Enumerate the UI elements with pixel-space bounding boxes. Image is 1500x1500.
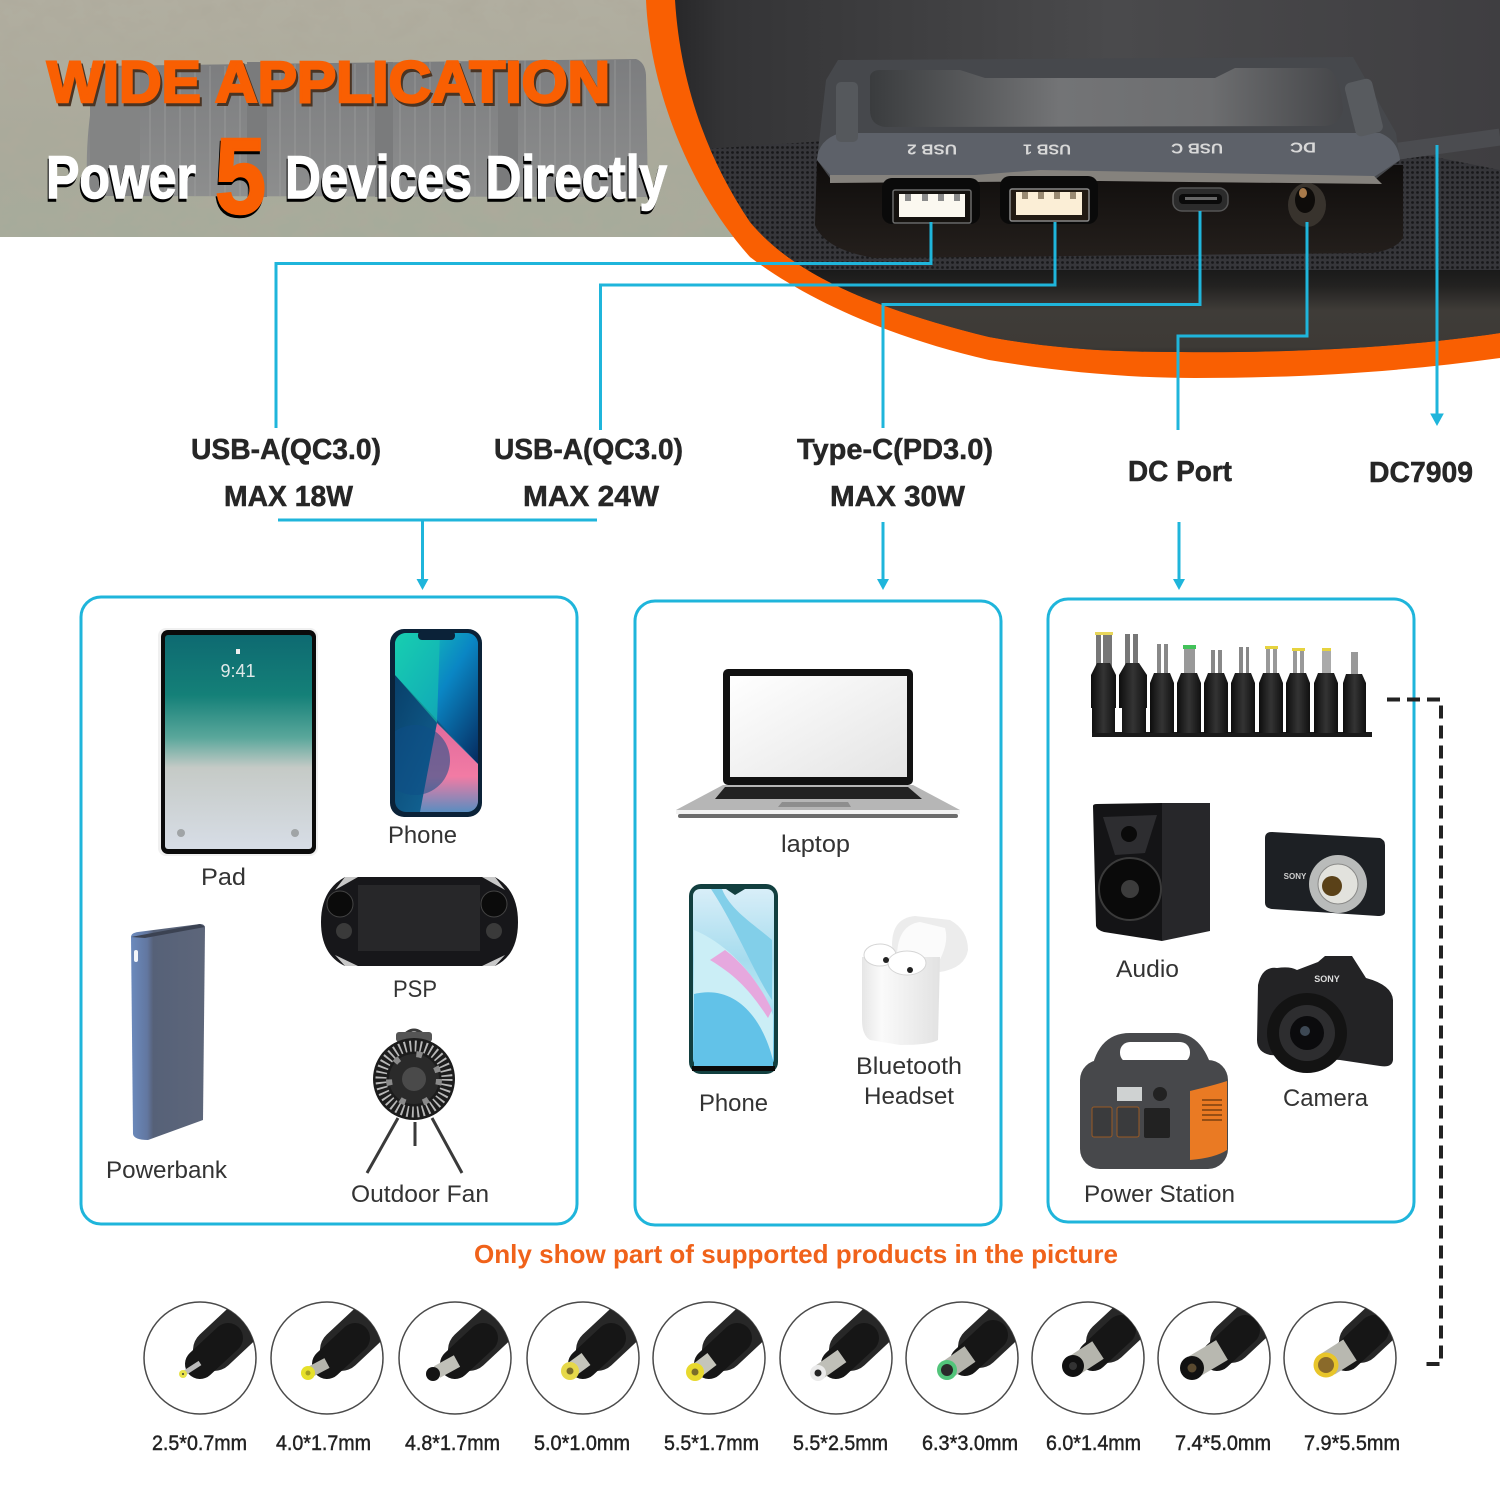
adapter size labels: 4.8*1.7mm [405, 1432, 500, 1455]
adapter tip: 6.3*3.0mm [905, 1301, 1019, 1415]
label: Type-C 30W: Type-C(PD3.0) [797, 434, 993, 466]
icon: pad: 9:41 [220, 661, 256, 681]
label: Type-C 30W: MAX 30W [830, 481, 966, 513]
text: device labels: Audio [1116, 956, 1179, 983]
label: USB-A 18W: MAX 18W [224, 481, 354, 513]
orange arc band [646, 0, 1500, 378]
port: DC jack [1288, 183, 1326, 227]
adapter size labels: 7.9*5.5mm [1304, 1432, 1400, 1455]
adapter tip: 7.9*5.5mm [1283, 1301, 1397, 1415]
adapter size labels: 2.5*0.7mm [152, 1432, 247, 1455]
note: supported products: Only show part of supported products in the picture [474, 1239, 1118, 1269]
icon: phone [380, 629, 482, 817]
icon: speaker [1093, 803, 1210, 941]
header photo: solar panel on grass [0, 0, 760, 237]
label: USB-A 24W: MAX 24W [523, 481, 660, 513]
port box body [815, 160, 1403, 258]
icon: compact camera [1265, 832, 1385, 916]
subtitle: Power 5 Devices Directly: Devices Directly [285, 144, 668, 211]
text: device labels: Power Station [1084, 1181, 1235, 1208]
label: DC7909: DC7909 [1369, 457, 1473, 489]
adapter tip: 5.5*2.5mm [779, 1301, 893, 1415]
adapter tip: 4.0*1.7mm [270, 1301, 384, 1415]
icon: laptop [676, 669, 960, 818]
adapter size labels: 6.0*1.4mm [1046, 1432, 1141, 1455]
icon: outdoor fan [367, 1030, 462, 1173]
adapter tip: 6.0*1.4mm [1031, 1301, 1145, 1415]
adapter size labels: 6.3*3.0mm [922, 1432, 1018, 1455]
product photo: output port box [675, 0, 1500, 352]
text: device labels: Phone [699, 1090, 768, 1117]
adapter tip: 4.8*1.7mm [398, 1301, 512, 1415]
product photo: output port box: DC [1290, 138, 1316, 156]
label: Type-C 30W [797, 434, 993, 513]
text: device labels: PSP [393, 976, 437, 1003]
subtitle: Power 5 Devices Directly: Power [46, 144, 196, 211]
icon: mirrorless camera [1257, 956, 1393, 1073]
connector lines from ports to labels [276, 145, 1443, 430]
text: device labels: Outdoor Fan [351, 1181, 489, 1208]
subtitle: Power 5 Devices Directly [46, 115, 668, 236]
text: device labels: Camera [1283, 1085, 1369, 1112]
icon: compact camera: SONY [1284, 872, 1307, 881]
text: device labels [699, 831, 962, 1117]
adapter size labels [152, 1432, 1400, 1455]
icon: pad [158, 628, 318, 856]
icon: bluetooth headset [862, 916, 968, 1045]
adapter size labels: 5.0*1.0mm [534, 1432, 630, 1455]
icon: phone [689, 884, 778, 1074]
label: USB-A 24W [494, 434, 683, 513]
text: device labels [106, 822, 489, 1208]
adapter tip: 5.5*1.7mm [652, 1301, 766, 1415]
icon: power station [1080, 1033, 1228, 1169]
adapter size labels: 5.5*1.7mm [664, 1432, 759, 1455]
label: USB-A 24W: USB-A(QC3.0) [494, 434, 683, 466]
port box top plate [817, 57, 1400, 182]
label: DC Port: DC Port [1128, 456, 1232, 488]
text: device labels: Powerbank [106, 1157, 228, 1184]
text: device labels: Pad [201, 864, 246, 891]
silkscreen labels (upside-down): USB 2 [907, 140, 957, 158]
icon: DC adapter tip row [1091, 632, 1372, 737]
adapter size labels: 4.0*1.7mm [276, 1432, 371, 1455]
charge cable [1385, 137, 1500, 153]
adapter size labels: 7.4*5.0mm [1175, 1432, 1271, 1455]
product photo: output port box: USB 1 [1023, 140, 1071, 158]
adapter size labels: 5.5*2.5mm [793, 1432, 888, 1455]
text: device labels: laptop [781, 831, 850, 858]
subtitle: Power 5 Devices Directly: 5 [215, 115, 266, 236]
port: USB 1 [1000, 176, 1098, 224]
arrows from labels down to panels [278, 520, 1185, 590]
adapter tip: 7.4*5.0mm [1157, 1301, 1271, 1415]
port: USB 2 [882, 178, 980, 224]
icon: PSP [321, 877, 518, 966]
icon: powerbank [131, 924, 205, 1140]
adapter tip: 5.0*1.0mm [526, 1301, 640, 1415]
panel: USB-A devices [81, 597, 577, 1224]
text: device labels: Headset [864, 1083, 954, 1110]
text: device labels: Bluetooth [856, 1053, 962, 1080]
text: device labels: Phone [388, 822, 457, 849]
product photo: output port box: USB C [1171, 140, 1223, 156]
panel: Type-C devices [635, 601, 1001, 1225]
label: USB-A 18W: USB-A(QC3.0) [191, 434, 381, 466]
panel: DC devices [1048, 599, 1414, 1222]
dashed connector to adapter tips [1387, 700, 1441, 1364]
icon: mirrorless camera: SONY [1314, 974, 1340, 984]
adapter tip: 2.5*0.7mm [143, 1301, 257, 1415]
label: USB-A 18W [191, 434, 381, 513]
port labels [191, 434, 1473, 513]
port: USB C [1173, 188, 1228, 211]
text: device labels [1084, 956, 1369, 1208]
title block [46, 50, 668, 236]
title: WIDE APPLICATION: WIDE APPLICATION [47, 50, 610, 115]
